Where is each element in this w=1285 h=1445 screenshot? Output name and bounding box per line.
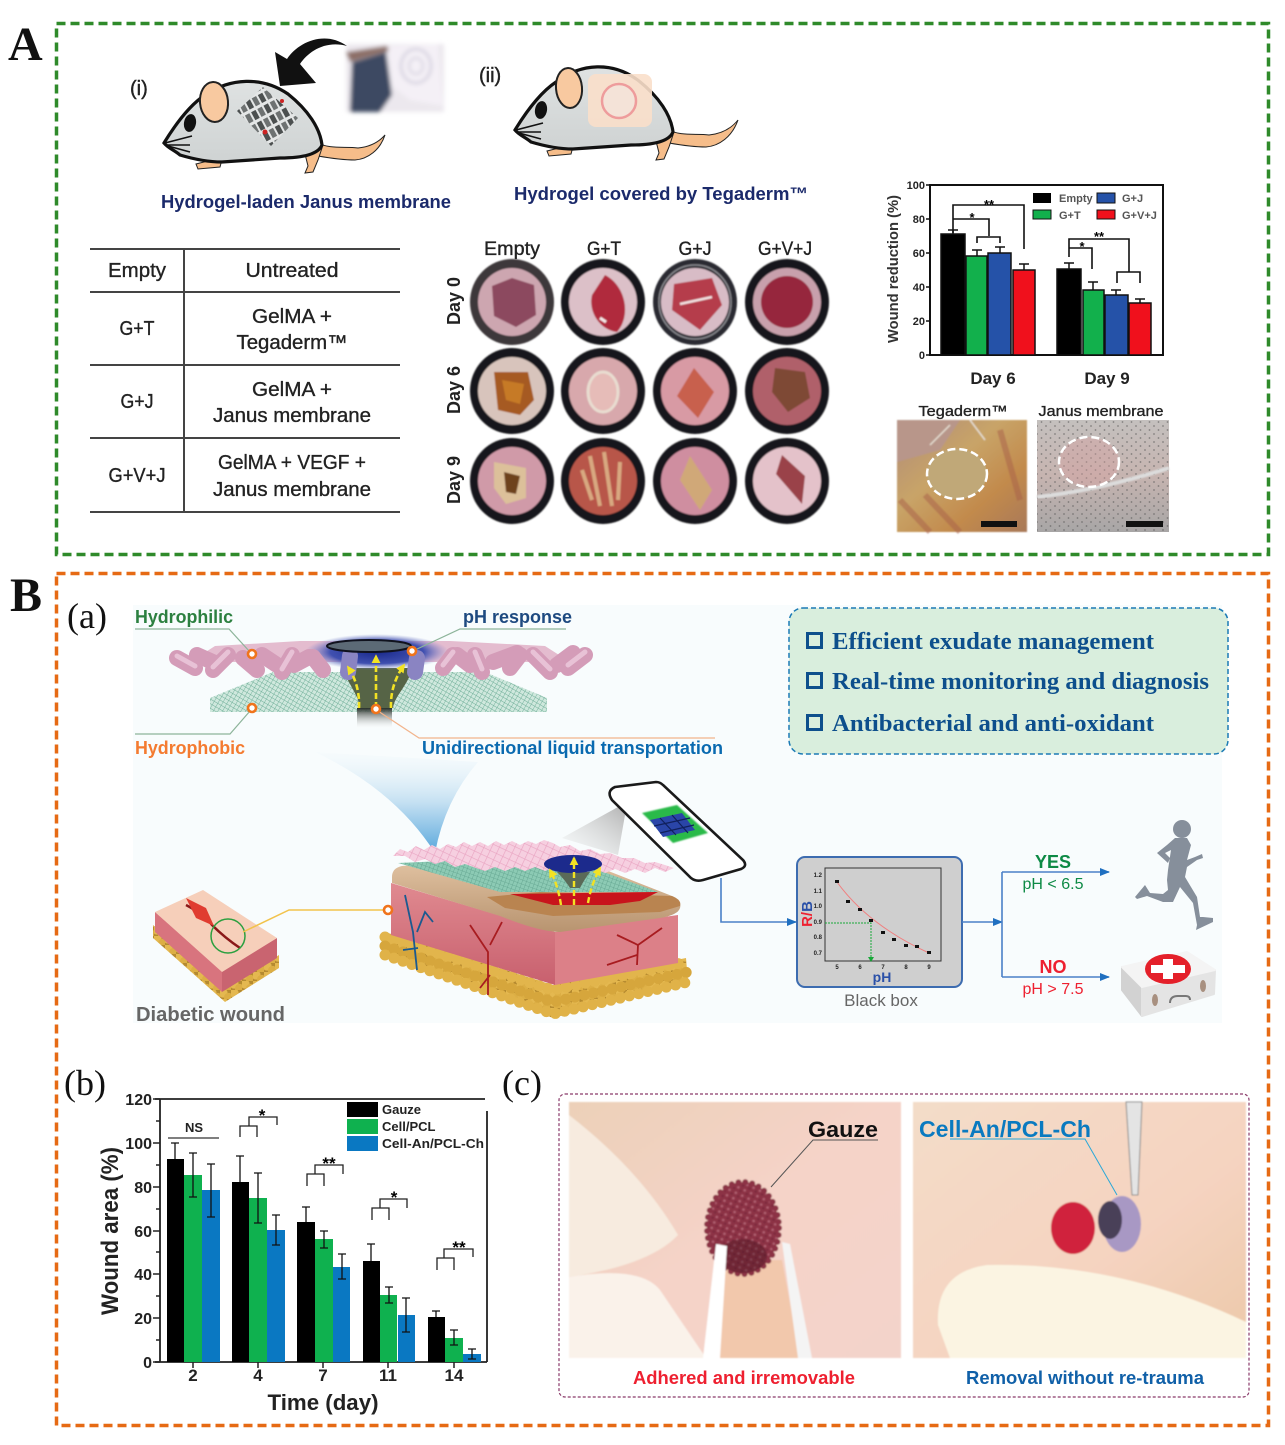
YES branch text: YES (1035, 852, 1071, 872)
label (a): (a) (67, 596, 107, 636)
epidermis (392, 852, 680, 932)
photo: Janus membrane: Janus membrane (1038, 403, 1164, 420)
x labels: Day 9 (1084, 369, 1130, 388)
label: Black box: Black box (844, 991, 918, 1010)
y tick labels: 20 (134, 1311, 152, 1328)
pink fibres (177, 653, 585, 672)
black box plot: 8 (904, 965, 908, 971)
significance brackets: ** (1094, 229, 1105, 244)
black box plot: 5 (835, 965, 839, 971)
black box plot: 9 (927, 965, 931, 971)
fat globules (385, 937, 688, 1014)
photo: Cell-An/PCL-Ch (913, 1102, 1246, 1358)
yellow liquid arrows (348, 656, 404, 708)
black box plot: 1.2 (814, 873, 823, 879)
x tick labels (188, 1366, 464, 1385)
mini yellow arrows (550, 858, 600, 905)
photo: Janus membrane (1037, 403, 1169, 532)
axes and tick labels: 80 (913, 214, 925, 226)
black box plot: R/B (799, 901, 816, 927)
black box plot: 0.9 (814, 920, 823, 926)
caption: Hydrogel-laden Janus membrane: Hydrogel-laden Janus membrane (161, 192, 451, 212)
small diabetic wound block (153, 890, 279, 1002)
black box plot: 0.8 (814, 935, 823, 941)
label: Hydrophilic: Hydrophilic (135, 607, 233, 627)
significance brackets: * (259, 1106, 266, 1125)
pink hydrophilic mesh (393, 840, 674, 873)
orange markers (248, 647, 416, 713)
wound photo grid: G+J (678, 239, 712, 260)
funnel pore (342, 668, 413, 708)
wound photo grid: Day 0 (444, 277, 464, 325)
x tick labels: 2 (188, 1366, 198, 1385)
label (ii): (ii) (479, 65, 501, 87)
group definition table: Tegaderm™ (236, 332, 348, 354)
significance brackets: * (969, 210, 975, 225)
label: Diabetic wound: Diabetic wound (136, 1004, 285, 1026)
central dish (327, 640, 411, 652)
chart legend (347, 1102, 484, 1151)
axis ticks (153, 1099, 454, 1368)
significance brackets: NS (185, 1120, 203, 1135)
wound photo grid: Empty (484, 239, 541, 260)
caption: removal: Removal without re-trauma (966, 1368, 1205, 1388)
blood vessels (403, 895, 662, 995)
black box plot: 6 (858, 965, 862, 971)
group definition table: G+J (120, 391, 154, 413)
fibre highlights (177, 652, 585, 669)
group definition table: GelMA + VEGF + (218, 452, 366, 474)
photo: gauze (569, 1102, 901, 1358)
axes and tick labels: 40 (913, 282, 925, 294)
chart legend (1033, 193, 1157, 222)
hydrophobic net layer (210, 672, 547, 712)
panel A (56, 24, 1268, 554)
x tick labels: 14 (445, 1366, 464, 1385)
label (c): (c) (502, 1063, 542, 1103)
smartphone reading the sensor (610, 782, 745, 881)
mini funnel (557, 872, 590, 888)
skin block with dressing (385, 840, 688, 1018)
label: pH response: pH response (463, 607, 572, 627)
axis title: Wound reduction (%) (885, 195, 902, 343)
black box plot (797, 857, 962, 987)
axis title y: Wound area (%) (97, 1147, 124, 1315)
mouse with Janus membrane (164, 81, 385, 173)
wound photo grid (444, 239, 829, 524)
blue zoom cone (315, 752, 478, 853)
chart legend: G+V+J (1122, 210, 1157, 222)
x tick labels: 7 (318, 1366, 328, 1385)
wound bed (510, 892, 658, 905)
y tick labels: 80 (134, 1180, 152, 1197)
panel A dashed border (56, 24, 1268, 554)
chart legend: Gauze (382, 1102, 421, 1117)
icon: curved black arrow (275, 38, 347, 86)
NO branch text: pH > 7.5 (1023, 981, 1084, 998)
dashed frame (559, 1094, 1249, 1397)
group definition table (90, 249, 400, 512)
leader lines (135, 629, 715, 738)
panel letter B: B (10, 569, 42, 622)
chart legend: G+J (1122, 193, 1143, 205)
blue pH-responsive zone (305, 634, 449, 670)
group definition table: Janus membrane (213, 479, 371, 501)
photo: Tegaderm (897, 403, 1027, 532)
y tick labels: 60 (134, 1224, 152, 1241)
connector: small block to large block (243, 906, 392, 932)
panel B (56, 574, 1268, 1426)
axes and tick labels: 20 (913, 316, 925, 328)
significance brackets (953, 197, 1140, 283)
chart legend: G+T (1059, 210, 1081, 222)
YES branch text (1023, 852, 1084, 893)
axes and tick labels: 60 (913, 248, 925, 260)
YES branch text: pH < 6.5 (1023, 876, 1084, 893)
group definition table: GelMA + (252, 306, 332, 328)
black box plot: 0.7 (814, 951, 823, 957)
wound photo grid: Day 6 (444, 366, 464, 414)
blue connector to black box (721, 878, 796, 922)
dermis (391, 883, 555, 985)
significance brackets: ** (322, 1154, 336, 1173)
axes and tick labels: 0 (919, 350, 925, 362)
feature callout box (789, 608, 1228, 754)
bar chart: wound area (97, 1092, 487, 1415)
photo: Cell-An/PCL-Ch: Cell-An/PCL-Ch (919, 1116, 1091, 1142)
label (b): (b) (64, 1063, 106, 1103)
label: Unidirectional liquid transportation: Unidirectional liquid transportation (422, 738, 723, 758)
x tick labels: 4 (253, 1366, 263, 1385)
feature callout box: Efficient exudate management (832, 629, 1154, 655)
caption: adhered: Adhered and irremovable (633, 1368, 855, 1388)
hydrophilic upper mesh band (190, 641, 570, 662)
wound photo grid: Day 9 (444, 456, 464, 504)
wound photo grid: G+T (587, 239, 621, 260)
icon: runner (1135, 820, 1213, 930)
group definition table: G+T (120, 318, 154, 340)
panel (c) comparison photos (559, 1094, 1249, 1397)
label (i): (i) (130, 78, 148, 100)
black box plot: 1.1 (814, 889, 823, 895)
panel B dashed border (56, 574, 1268, 1426)
group definition table: Untreated (246, 260, 338, 282)
significance brackets (168, 1106, 473, 1270)
x labels: Day 6 (970, 369, 1016, 388)
NO branch text (1023, 957, 1084, 998)
y tick labels: 120 (125, 1092, 152, 1109)
fat layer (385, 932, 688, 1018)
significance brackets: ** (452, 1238, 466, 1257)
group definition table: Janus membrane (213, 405, 371, 427)
photo: gauze: Gauze (808, 1117, 878, 1142)
black box plot: pH (873, 969, 891, 985)
bars day 6 and day 9 (941, 230, 1151, 355)
error bars (171, 1143, 476, 1359)
schematic (a) background (133, 605, 1222, 1023)
mouse with Tegaderm cover (515, 67, 738, 160)
bar chart: wound reduction (885, 180, 1163, 388)
group definition table: G+V+J (108, 465, 166, 487)
group definition table: Empty (108, 260, 166, 282)
feature callout box: Real-time monitoring and diagnosis (832, 669, 1209, 695)
chart legend: Cell/PCL (382, 1119, 436, 1134)
panel letter A: A (8, 18, 43, 71)
caption: Hydrogel covered by Tegaderm: Hydrogel covered by Tegaderm™ (514, 184, 808, 204)
chart legend: Cell-An/PCL-Ch (382, 1136, 484, 1151)
bars (167, 1159, 481, 1362)
gray cone to phone (562, 807, 625, 855)
significance brackets: * (391, 1188, 398, 1207)
Janus membrane cross-section (135, 629, 715, 738)
significance brackets: * (1079, 239, 1085, 254)
x tick labels: 11 (379, 1366, 397, 1385)
wound photo grid: G+V+J (758, 239, 812, 260)
axes and tick labels (907, 180, 1163, 362)
significance brackets: ** (984, 197, 995, 212)
x labels (970, 369, 1130, 388)
black box plot: 1.0 (814, 904, 823, 910)
chart legend: Empty (1059, 193, 1094, 205)
hydrophobic sheet (398, 856, 658, 892)
decision arrows (962, 872, 1109, 977)
group definition table: GelMA + (252, 379, 332, 401)
icon: first aid kit (1122, 952, 1215, 1016)
y tick labels: 100 (125, 1136, 152, 1153)
feature callout box: Antibacterial and anti-oxidant (832, 711, 1154, 737)
axes (155, 1099, 487, 1362)
black box plot: 7 (881, 965, 885, 971)
NO branch text: NO (1040, 957, 1066, 977)
y tick labels (125, 1092, 152, 1372)
y tick labels: 0 (143, 1355, 152, 1372)
axes and tick labels: 100 (907, 180, 925, 192)
wound rim (487, 892, 680, 916)
photo: Tegaderm: Tegaderm™ (918, 403, 1008, 420)
photo: membrane in tweezers (346, 44, 444, 112)
axis title x: Time (day) (268, 1390, 378, 1415)
y tick labels: 40 (134, 1267, 152, 1284)
label: Hydrophobic: Hydrophobic (135, 738, 245, 758)
